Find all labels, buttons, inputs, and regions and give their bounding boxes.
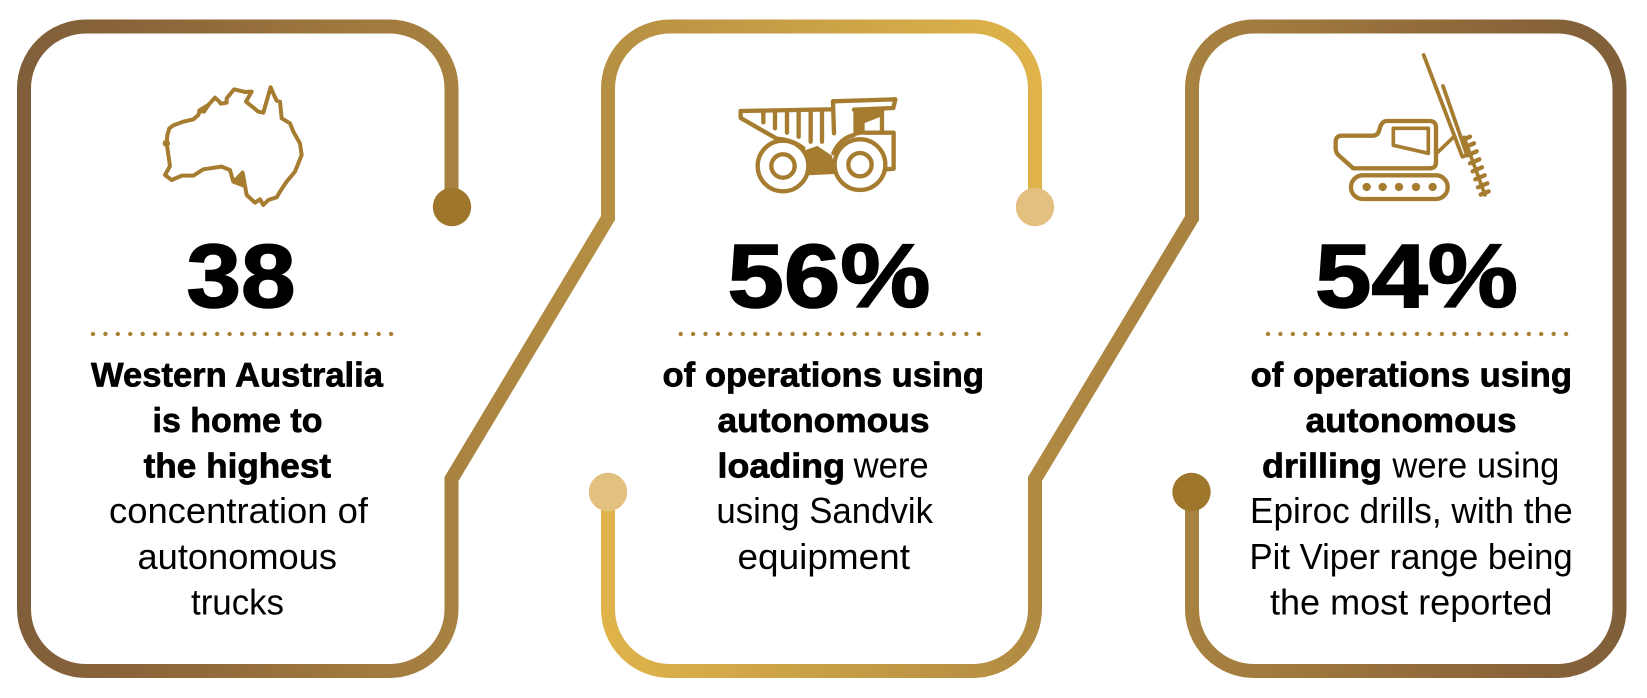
text: Western Australia description: trucks: [191, 582, 284, 623]
text: Epiroc drilling description: Epiroc drills, with the: [1250, 490, 1573, 531]
panel 2 bottom border: [608, 479, 1035, 671]
panel 1 connector dot: [433, 188, 471, 226]
text: Western Australia description: autonomous: [138, 536, 337, 577]
text: Sandvik loading description: of operations using: [662, 356, 984, 394]
text: Sandvik loading description: loading: [718, 447, 845, 485]
icon: drill rig: [1336, 55, 1489, 199]
panel 3 connector dot: [1172, 473, 1211, 511]
text: Western Australia description: the highest: [144, 447, 332, 485]
statistic: 54%: 54%: [1315, 227, 1518, 327]
panel: Western Australia trucks: [24, 26, 471, 671]
connector: diagonal between panels 2 and 3: [1035, 217, 1192, 480]
text: Epiroc drilling description: were using: [1391, 444, 1559, 485]
panel 2 top connector dot: [1016, 188, 1054, 226]
text: Epiroc drilling description: Pit Viper range being: [1250, 536, 1573, 577]
panel 1 border: [24, 26, 452, 671]
text: Western Australia description: is home to: [152, 402, 322, 440]
text: Western Australia description: concentration of: [109, 490, 369, 531]
panel 3 border: [1192, 26, 1620, 671]
text: Epiroc drilling description: drilling: [1262, 447, 1382, 485]
icon: Australia map: [165, 87, 302, 205]
text: Epiroc drilling description: of operations using: [1251, 356, 1572, 394]
dotted divider: [93, 332, 392, 336]
text: Western Australia description: Western Australia: [91, 356, 384, 394]
panel 2 bottom connector dot: [589, 473, 627, 511]
text: Sandvik loading description: equipment: [738, 536, 910, 577]
statistic: 38: 38: [186, 227, 296, 327]
panel: Epiroc drilling: [1172, 26, 1620, 671]
text: Sandvik loading description: using Sandvik: [716, 490, 934, 531]
text: Epiroc drilling description: autonomous: [1306, 402, 1517, 440]
statistic: 56%: 56%: [728, 227, 930, 327]
dotted divider: [681, 332, 980, 336]
panel: Sandvik loading: [589, 26, 1054, 671]
text: Sandvik loading description: [662, 356, 984, 577]
icon: haul truck: [741, 99, 895, 191]
text: Epiroc drilling description: [1250, 356, 1573, 623]
dotted divider: [1268, 332, 1566, 336]
text: Epiroc drilling description: the most reported: [1270, 582, 1552, 623]
connector: diagonal between panels 1 and 2: [452, 217, 608, 480]
text: Western Australia description: [91, 356, 384, 623]
text: Sandvik loading description: were: [853, 444, 929, 485]
panel 2 top border: [608, 26, 1035, 218]
text: Sandvik loading description: autonomous: [718, 402, 930, 440]
